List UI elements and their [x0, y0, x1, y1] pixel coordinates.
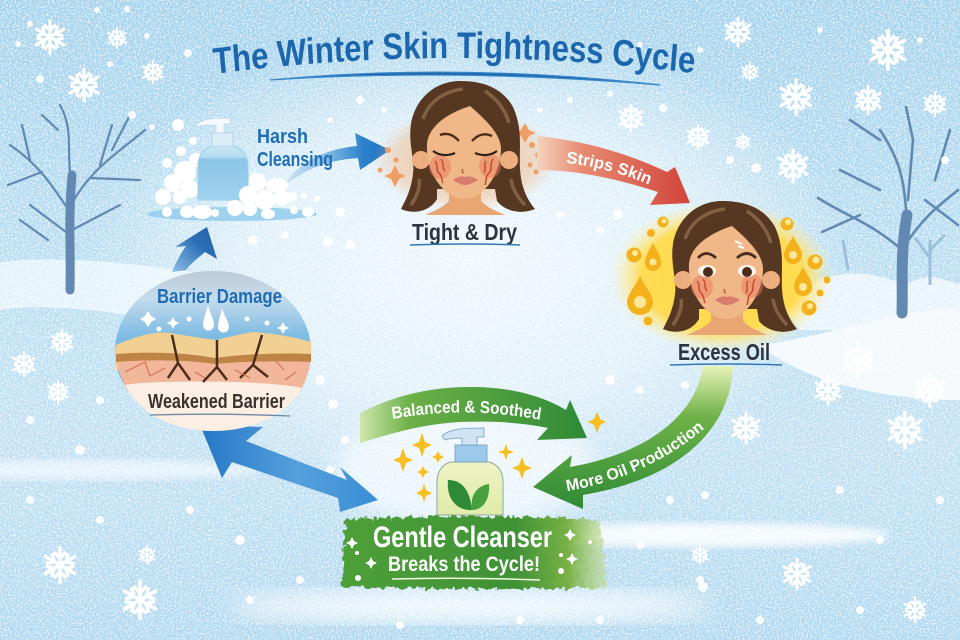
arrow: balanced and soothed: Balanced & Soothed — [392, 400, 542, 420]
panel: excess oil face — [610, 201, 834, 353]
arrow: strips skin — [537, 136, 690, 205]
arrow: strips skin: Strips Skin — [566, 152, 651, 184]
arrow: more oil production: More Oil Production — [566, 424, 704, 491]
label: tight and dry: Tight & Dry — [412, 219, 517, 245]
right winter tree — [818, 107, 958, 313]
title: The Winter Skin Tightness Cycle — [212, 31, 694, 75]
arrow: harsh cleansing to tight and dry — [285, 133, 390, 186]
label: excess oil: Excess Oil — [678, 339, 770, 365]
panel: barrier damage circle — [115, 271, 311, 431]
label: harsh cleansing — [257, 126, 333, 171]
banner: gentle cleanser — [342, 516, 608, 589]
left winter tree — [8, 105, 145, 290]
sparkles — [393, 412, 606, 502]
panel: tight and dry face — [373, 81, 557, 215]
icon: gentle cleanser bottle — [437, 428, 503, 515]
panel: barrier damage circle: Barrier Damage — [157, 286, 282, 308]
arrow: barrier up to cleansing — [172, 227, 217, 272]
label: harsh cleansing: Harsh — [257, 126, 308, 148]
label: harsh cleansing: Cleansing — [257, 149, 333, 171]
panel: barrier damage circle: Weakened Barrier — [148, 391, 285, 413]
arrow: more oil production — [533, 366, 733, 509]
banner: gentle cleanser: Gentle Cleanser — [373, 521, 552, 554]
distant faint tree — [843, 235, 945, 285]
banner: gentle cleanser: Breaks the Cycle! — [388, 553, 540, 576]
arrow: balanced and soothed — [360, 387, 587, 443]
arrow: two-way barrier and cleanser — [200, 425, 378, 512]
icon: harsh cleanser bottle with foam — [147, 118, 320, 221]
